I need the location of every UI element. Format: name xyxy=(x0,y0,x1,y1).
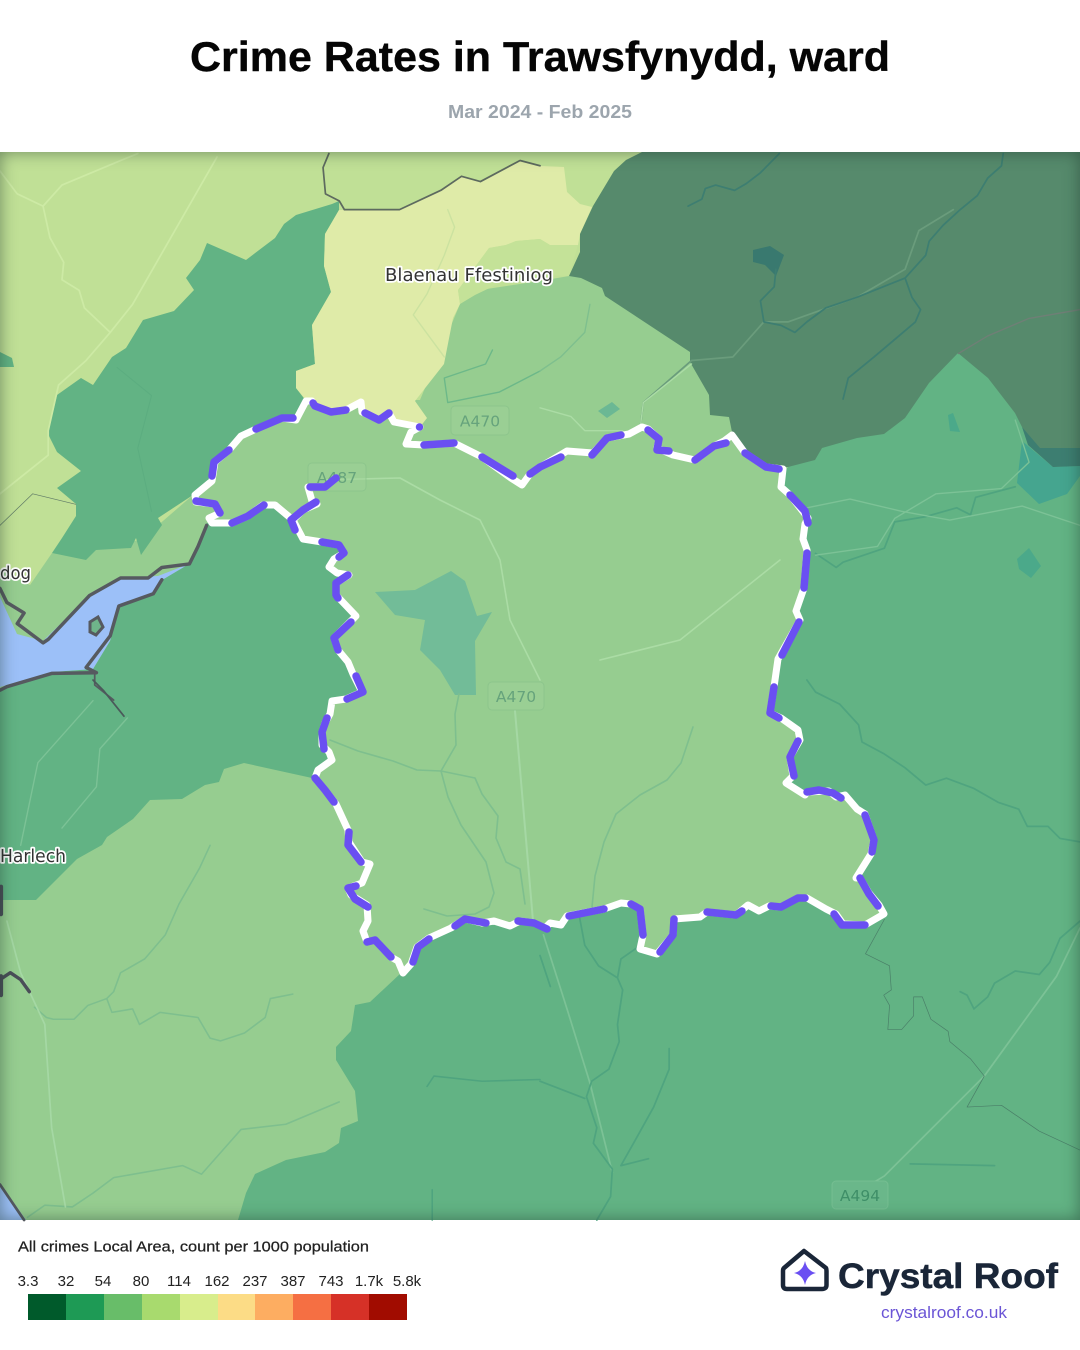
legend scale labels: 54 xyxy=(95,1273,111,1290)
ward boundary: white base line xyxy=(195,401,884,973)
road badge A470 centre xyxy=(488,682,544,710)
road badge A487: A487 xyxy=(317,469,357,487)
region: Blaenau Ffestiniog yellow xyxy=(296,160,592,427)
legend scale labels: 32 xyxy=(58,1273,74,1290)
map edge vignette xyxy=(0,152,1080,1220)
ward interior forest patch xyxy=(375,571,492,695)
road badge A470 centre: A470 xyxy=(496,688,536,706)
legend scale labels: 237 xyxy=(242,1273,268,1290)
legend scale labels: 114 xyxy=(167,1273,191,1290)
legend scale labels: 387 xyxy=(280,1273,306,1290)
road badge A494 xyxy=(832,1181,888,1209)
rivers: south east xyxy=(540,680,1080,1220)
region: small west patch xyxy=(0,352,14,367)
legend title: All crimes Local Area, count per 1000 population xyxy=(18,1238,369,1256)
purple spur over A487 badge xyxy=(310,478,336,487)
map: crime rate choropleth xyxy=(0,152,1080,1220)
lake: dark reservoir xyxy=(753,246,784,276)
map background region xyxy=(0,152,1080,1220)
place label: Porthmadog fragment: dog xyxy=(0,563,31,584)
icon: house with star xyxy=(783,1251,826,1289)
legend xyxy=(18,1238,422,1320)
road badge A487 xyxy=(308,463,366,491)
wordmark: Crystal Roof xyxy=(838,1257,1058,1296)
region: north-west low crime band xyxy=(0,152,642,585)
region: east and south xyxy=(238,340,1080,1220)
legend scale labels: 743 xyxy=(318,1273,344,1290)
ward boundary spur xyxy=(293,478,336,520)
region: west green xyxy=(0,505,365,900)
ward boundary: purple dashes xyxy=(196,403,878,962)
ward interior rivers and road xyxy=(320,478,780,921)
road badge A470 north: A470 xyxy=(460,412,500,430)
legend scale labels xyxy=(18,1273,422,1290)
website url: crystalroof.co.uk xyxy=(881,1304,1008,1322)
legend scale labels: 80 xyxy=(133,1273,149,1290)
lake north east xyxy=(948,413,960,432)
rivers: north east xyxy=(540,154,1080,687)
rivers: south west xyxy=(0,680,540,1220)
lake east xyxy=(1017,548,1041,578)
road badge A494: A494 xyxy=(840,1187,880,1205)
estuary water xyxy=(0,564,189,687)
logo: Crystal Roof xyxy=(783,1251,1058,1322)
reservoir east teal xyxy=(1017,441,1080,504)
region: north-west green xyxy=(48,201,339,560)
island in estuary xyxy=(90,617,103,635)
region: north-east dark green xyxy=(569,152,1080,467)
place label: Harlech: Harlech xyxy=(0,846,66,867)
legend scale labels: 3.3 xyxy=(18,1273,38,1290)
reservoir band dark xyxy=(1022,427,1080,467)
legend colour bar xyxy=(28,1294,407,1320)
region: lime north of A470 xyxy=(458,239,578,304)
sea south west xyxy=(0,1183,26,1220)
place label: Blaenau Ffestiniog: Blaenau Ffestiniog xyxy=(385,265,553,286)
title: Crime Rates in Trawsfynydd, ward xyxy=(190,33,890,80)
lake: small north xyxy=(598,402,620,418)
road badge A470 north xyxy=(451,406,509,435)
legend scale labels: 1.7k xyxy=(355,1273,384,1290)
legend scale labels: 5.8k xyxy=(393,1273,422,1290)
subtitle: date range: Mar 2024 - Feb 2025 xyxy=(448,101,632,122)
rivers and roads: west xyxy=(0,154,540,700)
legend scale labels: 162 xyxy=(204,1273,230,1290)
